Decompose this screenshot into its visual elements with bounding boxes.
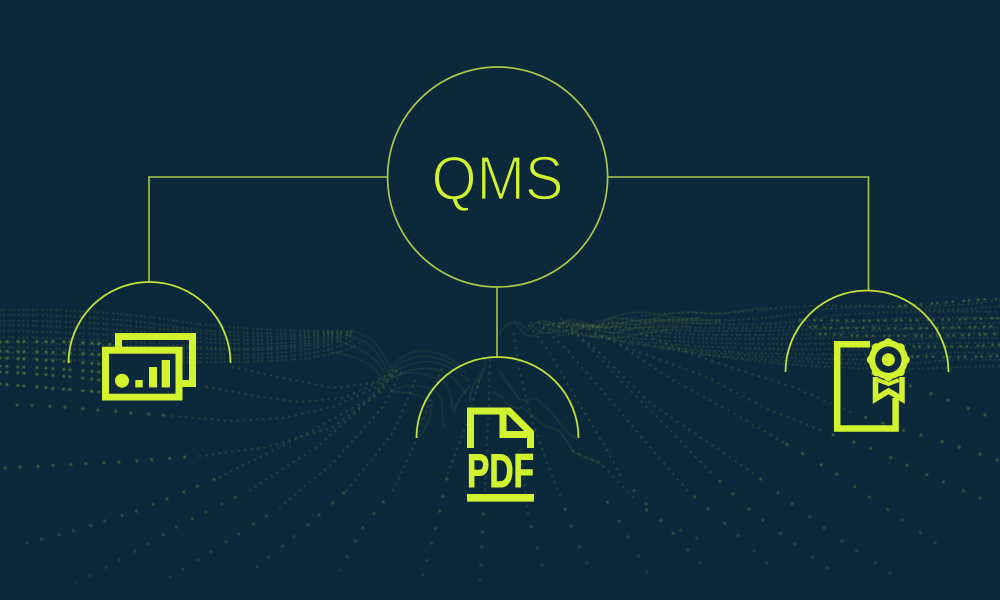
near fan dots, right bbox=[528, 370, 997, 573]
far fan dots, left bbox=[173, 357, 490, 507]
QMS label: QMS bbox=[432, 144, 564, 214]
arc bbox=[416, 357, 578, 438]
node: PDF document bbox=[416, 357, 578, 502]
near fan dots, left bbox=[5, 405, 485, 583]
node: dashboard reports bbox=[68, 282, 230, 397]
icon: dashboard cards bbox=[106, 336, 192, 397]
node: certificate bbox=[786, 290, 948, 428]
right bright dot rows bbox=[800, 298, 1000, 357]
right horizontal dot band bbox=[540, 300, 1000, 369]
arc bbox=[68, 282, 230, 363]
far fan dots, right bbox=[513, 322, 850, 513]
left near dot rows bbox=[0, 341, 120, 392]
bottom fade over dots bbox=[0, 470, 1000, 600]
wavy descending line bbox=[454, 360, 604, 466]
arc bbox=[786, 290, 948, 372]
left horizontal dot band bbox=[0, 310, 360, 362]
centre right wavy ridges bbox=[500, 308, 770, 338]
icon: PDF file bbox=[467, 411, 534, 502]
icon: certificate with seal bbox=[837, 338, 910, 428]
QMS circle node bbox=[388, 67, 608, 287]
dotted wave background bbox=[0, 298, 1000, 583]
central contour lines bbox=[330, 331, 470, 436]
icon: PDF file: PDF bbox=[467, 445, 534, 498]
connector lines bbox=[149, 177, 868, 358]
